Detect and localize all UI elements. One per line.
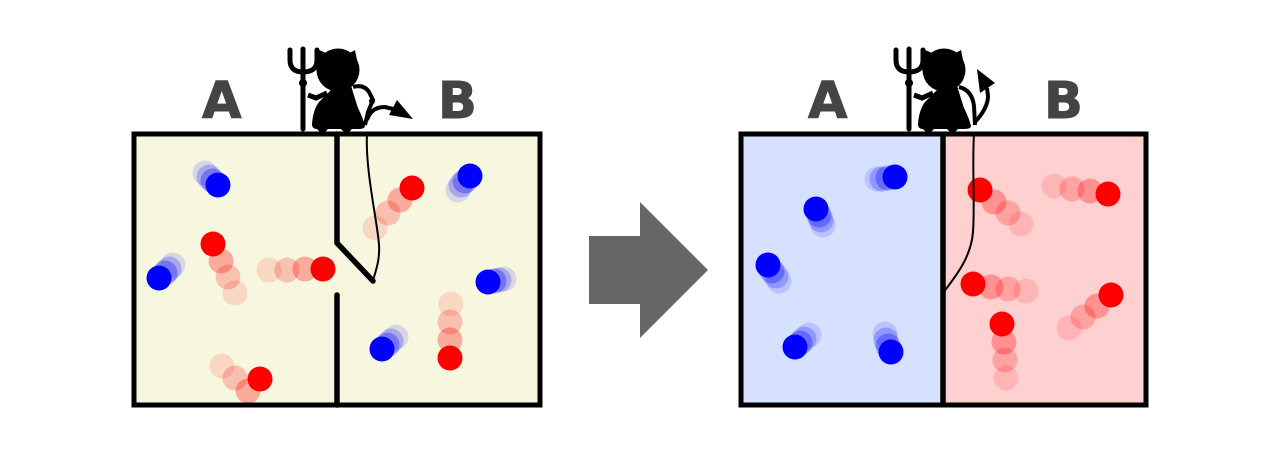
particle: red 3 xyxy=(960,272,1038,304)
particle: red 1 xyxy=(968,178,1034,236)
particle: blue 5 xyxy=(370,324,408,362)
particle: blue 1 xyxy=(192,160,230,198)
particle: blue 5 xyxy=(872,322,904,364)
string attached to door xyxy=(943,134,974,293)
demon tail xyxy=(959,87,988,125)
panel: left box before demon opens door xyxy=(134,134,540,405)
demon tail xyxy=(353,86,393,125)
particle: blue 2 xyxy=(804,196,836,238)
string pulling door xyxy=(367,134,379,281)
arrow: before to after xyxy=(589,202,708,338)
label: B left: B xyxy=(438,72,477,131)
icon: demon with trident, left xyxy=(290,48,413,132)
tail arrowhead xyxy=(389,100,413,119)
tail arrowhead xyxy=(977,69,995,93)
particle: blue 4 xyxy=(782,322,822,360)
particle: blue 2 xyxy=(446,164,482,202)
closed partition xyxy=(940,134,946,405)
label: B right: B xyxy=(1044,72,1083,131)
particle: red 5 xyxy=(210,354,272,404)
particle: red 4 xyxy=(1056,282,1124,340)
particle: red 2 xyxy=(1042,174,1120,206)
partition with open door xyxy=(337,134,373,405)
particle: blue 1 xyxy=(864,164,908,192)
particle: red 4 xyxy=(438,292,464,370)
particle: red 3 xyxy=(256,256,336,282)
particle: blue 4 xyxy=(476,266,516,294)
particle: blue 3 xyxy=(146,252,186,290)
particle: red 5 xyxy=(990,312,1018,390)
icon: demon with trident, right xyxy=(896,48,995,132)
particle: red 2 xyxy=(200,232,248,306)
panel: right box after sorting xyxy=(741,134,1146,405)
particle: blue 3 xyxy=(756,252,792,294)
label: A left: A xyxy=(202,72,242,131)
particle: red 1 xyxy=(362,176,424,240)
label: A right: A xyxy=(808,72,848,131)
